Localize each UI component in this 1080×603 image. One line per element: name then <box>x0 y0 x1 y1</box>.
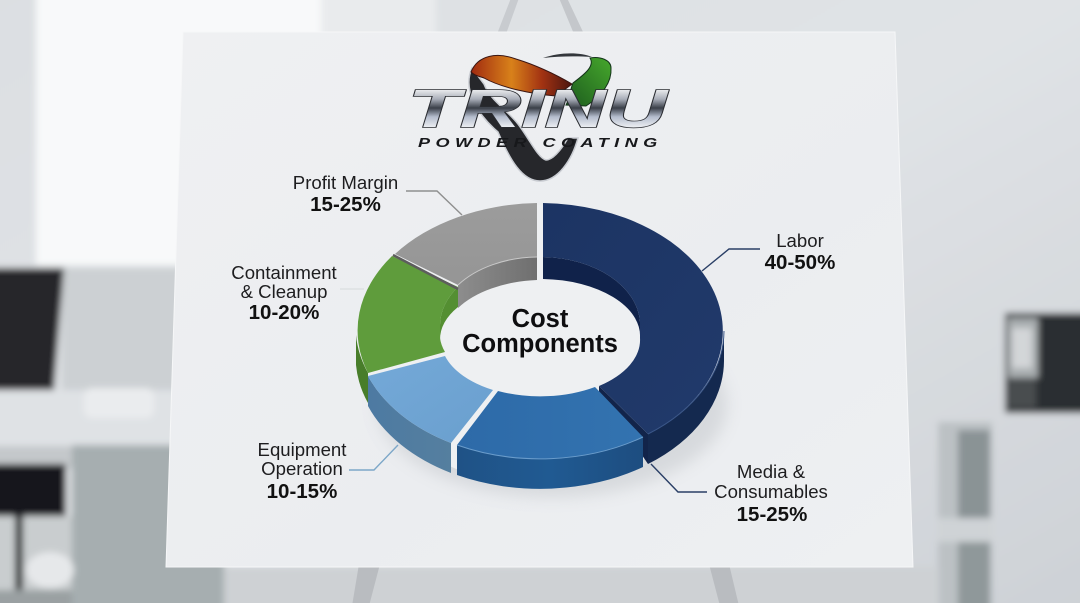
label: labor <box>765 230 835 274</box>
leader lines <box>340 191 760 492</box>
logo wordmark: TRINU <box>408 79 670 139</box>
label: profit margin: Profit Margin <box>293 172 398 193</box>
label: containment and cleanup: 10-20% <box>249 301 319 324</box>
label: containment and cleanup: & Cleanup <box>241 281 327 302</box>
segment: media and consumables 15-25% <box>457 387 643 489</box>
logo ring <box>469 68 578 181</box>
label: media and consumables: Media & <box>737 461 806 482</box>
center title: Components <box>462 330 618 358</box>
easel legs <box>352 0 739 603</box>
logo: TriNu Powder Coating <box>408 53 670 181</box>
chart shadow <box>377 313 727 497</box>
chart base and center hole <box>360 205 720 485</box>
segment: equipment operation 10-15% <box>368 356 493 473</box>
logo dark tip <box>543 53 592 58</box>
label: profit margin <box>293 172 398 216</box>
center title: Cost <box>512 305 569 333</box>
center title <box>462 305 618 358</box>
label: media and consumables: Consumables <box>714 481 828 502</box>
label: equipment operation: Equipment <box>258 439 347 460</box>
label: media and consumables <box>714 461 828 526</box>
logo red swoosh <box>471 55 572 96</box>
label: equipment operation <box>258 439 347 503</box>
logo green swoosh <box>566 57 611 106</box>
label: equipment operation: Operation <box>261 458 343 479</box>
segment: containment and cleanup 10-20% <box>356 256 458 403</box>
label: profit margin: 15-25% <box>310 193 381 216</box>
label: labor: Labor <box>776 230 824 251</box>
label: labor: 40-50% <box>765 251 835 274</box>
segment: labor 40-50% <box>543 203 724 464</box>
segment: profit margin 15-25% <box>393 203 537 308</box>
logo tagline: POWDER COATING <box>418 137 657 150</box>
label: equipment operation: 10-15% <box>267 480 337 503</box>
label: containment and cleanup <box>231 262 338 324</box>
label: media and consumables: 15-25% <box>737 503 807 526</box>
presentation board <box>166 32 913 567</box>
donut chart <box>356 203 727 497</box>
label: containment and cleanup: Containment <box>231 262 338 283</box>
